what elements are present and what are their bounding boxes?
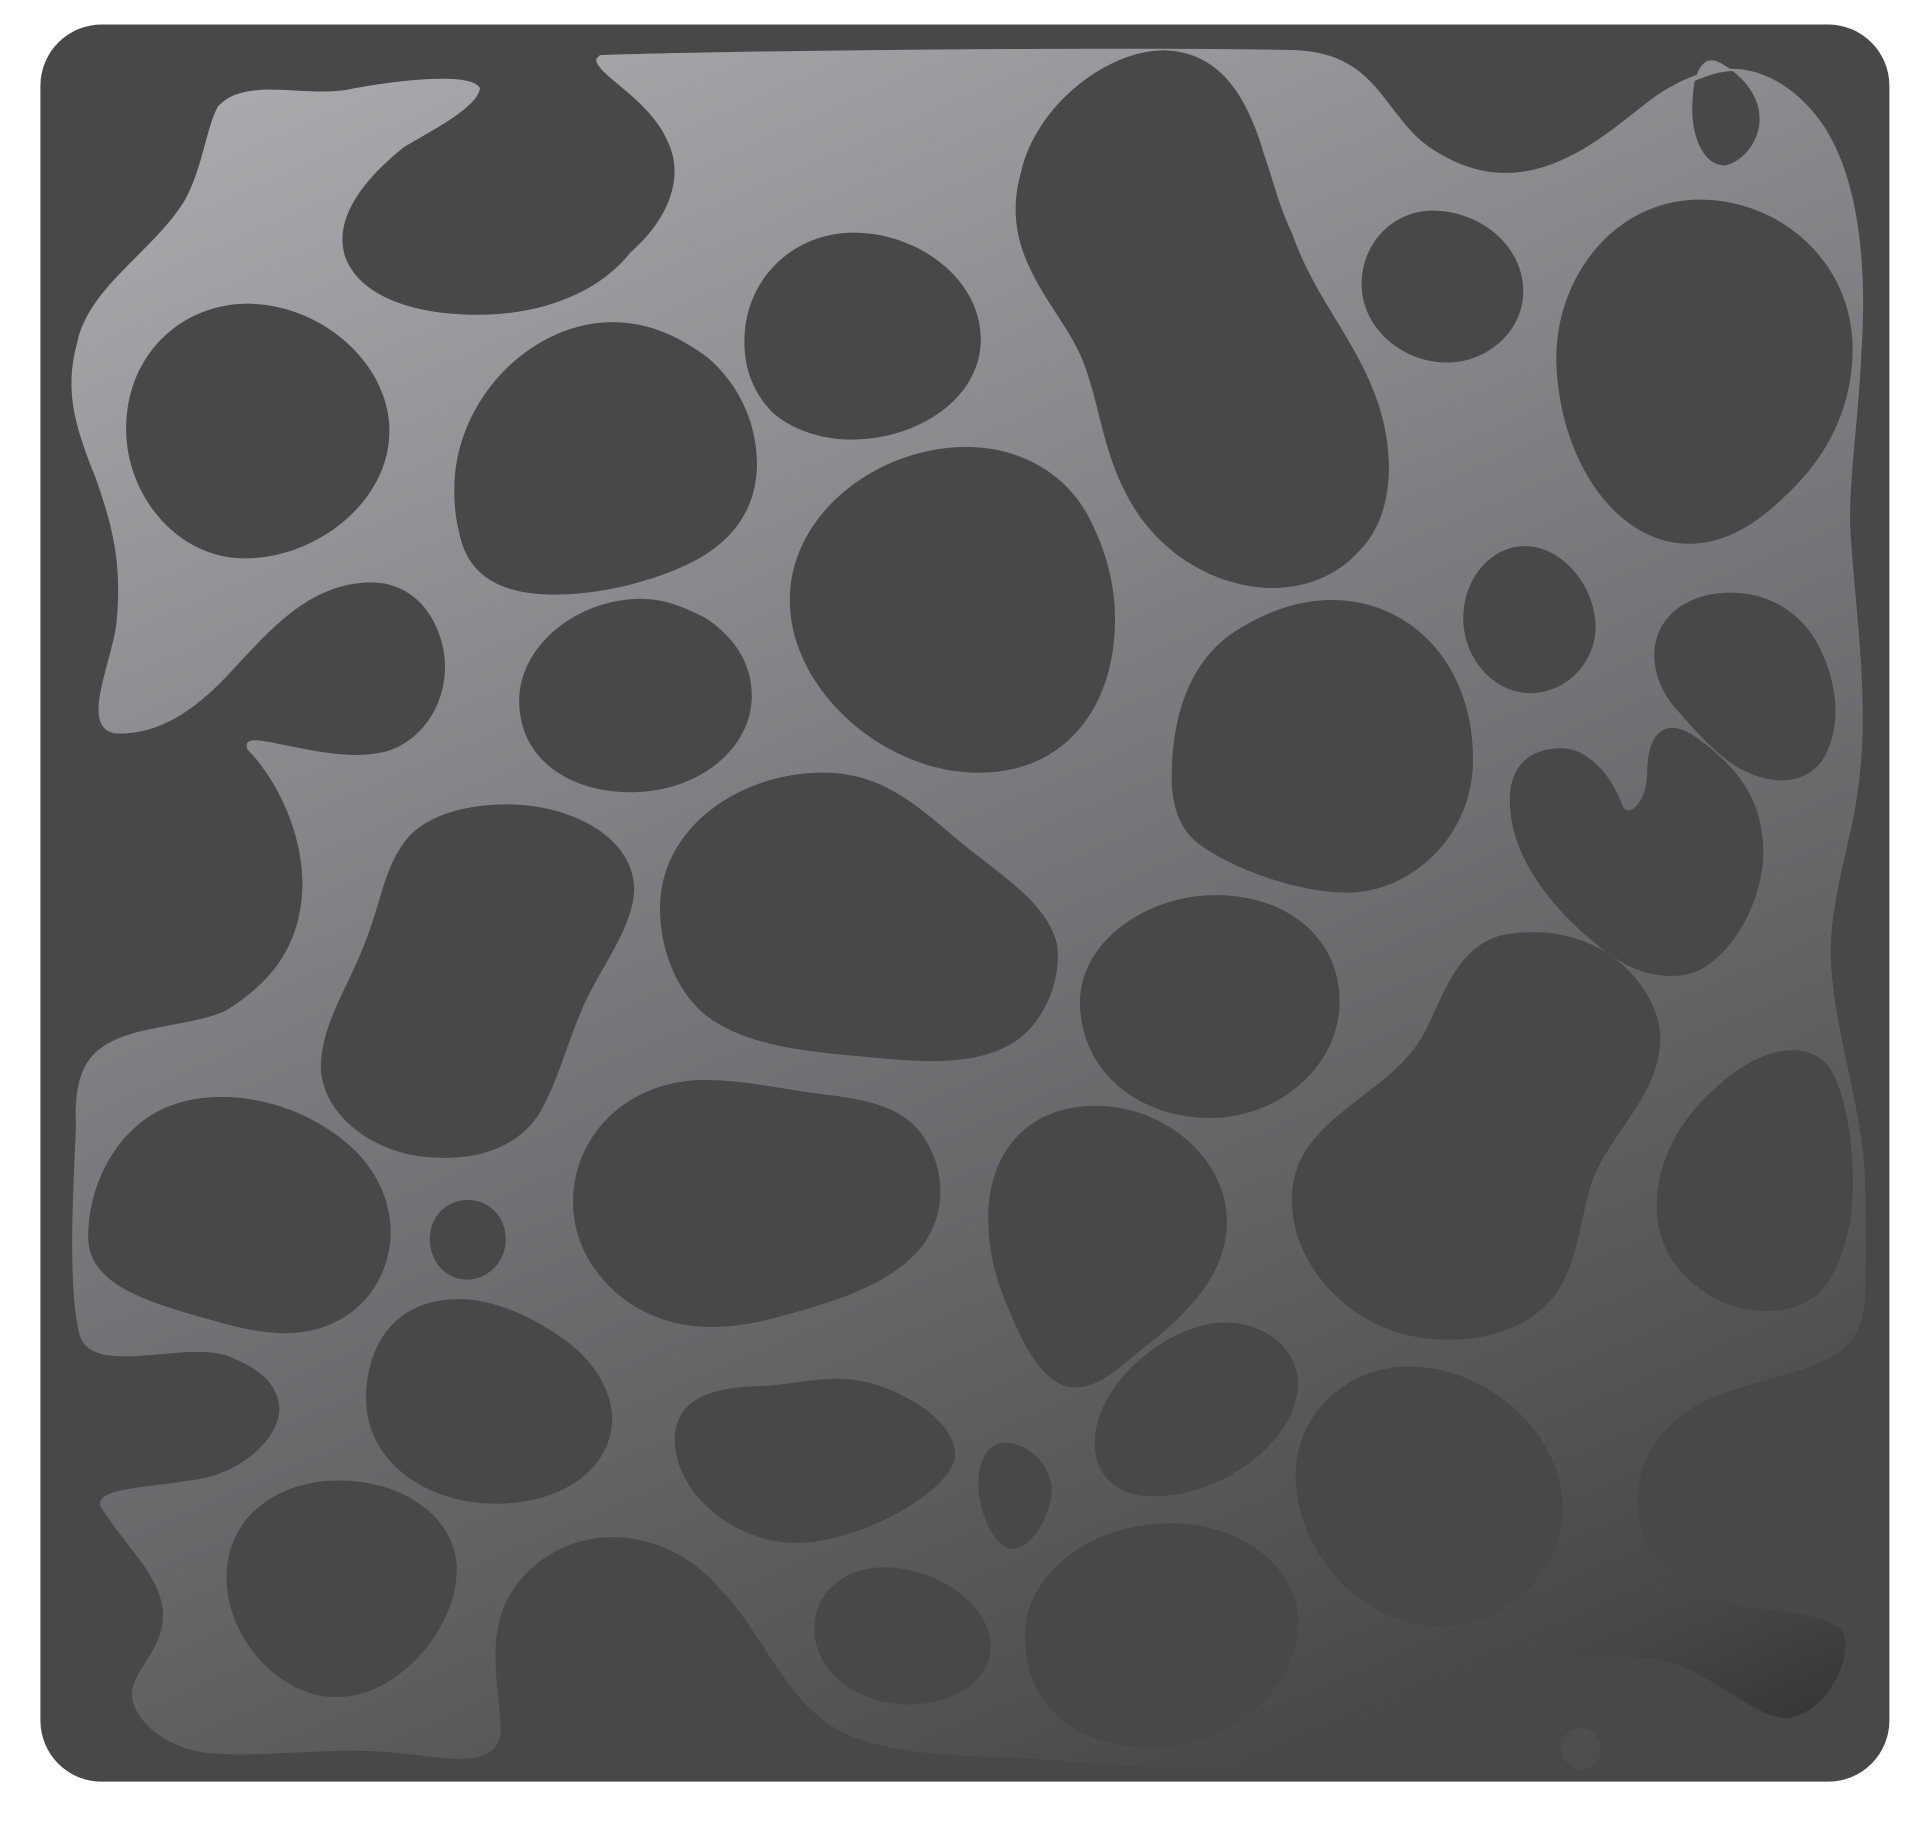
blob: small teardrop xyxy=(978,1442,1052,1549)
blob: upper middle-left xyxy=(454,322,757,595)
blob: top-right small xyxy=(1692,71,1760,165)
blob: far right oval xyxy=(1654,593,1835,780)
blob: right of centre large xyxy=(1172,600,1473,893)
blob: bottom-right large round xyxy=(1296,1367,1562,1626)
blob: tall dumbbell xyxy=(1016,50,1389,588)
blob: centre lower teardrop xyxy=(988,1106,1227,1387)
blob: bottom flat wide xyxy=(675,1379,955,1543)
blob: tiny round xyxy=(430,1200,506,1280)
blob: upper-right small round xyxy=(1362,211,1523,362)
blob: bottom-centre slanted oval xyxy=(1095,1322,1298,1496)
blob: right small round xyxy=(1463,546,1596,693)
blob: far right lower xyxy=(1657,1050,1853,1311)
blob: centre wide xyxy=(660,773,1058,1061)
blob: right large irregular xyxy=(1292,932,1660,1340)
blob: lower middle-left oval xyxy=(519,599,752,792)
blob: lower-centre wide xyxy=(573,1080,940,1327)
icon: faint dot at bottom xyxy=(1554,1721,1607,1776)
blob: lower-left mid xyxy=(366,1299,612,1504)
blob: upper-right large xyxy=(1556,200,1853,544)
blob: centre large xyxy=(790,447,1115,773)
blob: heart shape xyxy=(1510,728,1763,976)
blob: centre-right oval xyxy=(1080,895,1340,1118)
blob: bottom-left xyxy=(227,1480,457,1697)
blob: left large round xyxy=(126,304,389,558)
blob: top centre oval xyxy=(744,233,981,440)
blob: lower-left wide xyxy=(88,1097,391,1333)
blob: bottom small oval xyxy=(814,1567,991,1705)
icon: light tip of small top-right blob xyxy=(1695,60,1733,81)
blob: middle-left tall xyxy=(321,804,634,1158)
blob: bottom-centre large oval xyxy=(1025,1523,1298,1747)
